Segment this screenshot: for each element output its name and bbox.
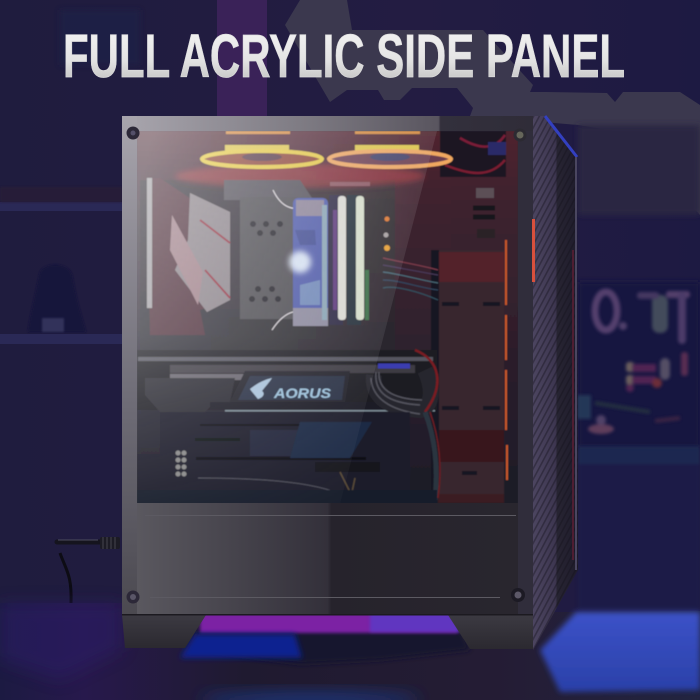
AORUS wordmark: AORUS [273,385,332,401]
case interior [137,131,518,504]
glass reflection overlay [137,131,437,504]
blue cooler fan [289,198,328,326]
lower motherboard slots [174,412,438,500]
top fans with rings [175,131,451,188]
case feet [122,615,533,649]
motherboard [140,180,395,288]
AORUS eagle logo [250,378,272,399]
RAM sticks [329,195,369,325]
shelves with figure [0,187,122,344]
motherboard LEDs [330,182,390,251]
glass panel frame [122,116,533,615]
right cable bay and drive tray [431,188,507,503]
CPU cooler [224,180,312,331]
top right wiring [440,131,506,177]
lower PSU shroud [122,503,533,616]
graphics card [137,350,437,418]
power cable [57,537,120,603]
corner screws [126,126,526,604]
PCIe cable bundle [371,350,440,500]
ATX power cable [383,258,438,300]
chipset heatsink [147,178,230,335]
case body frame [122,116,533,615]
under-case light glow [180,613,470,664]
desk surface [0,603,700,700]
red LED strip [532,219,535,282]
side front panel [533,116,578,650]
background hexagon wall [285,0,700,215]
blurred monitor glow right [577,291,700,609]
